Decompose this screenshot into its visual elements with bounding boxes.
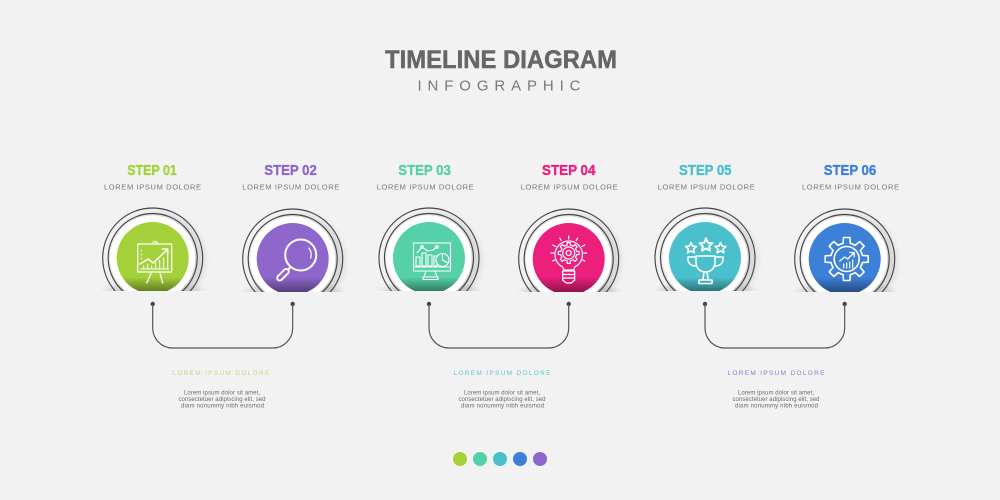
- connector 3: [703, 302, 847, 348]
- text block 3: diam nonummy nibh euismod: [735, 404, 818, 410]
- text block 2: diam nonummy nibh euismod: [461, 404, 544, 410]
- text block 2: LOREM IPSUM DOLORE: [454, 370, 551, 377]
- text block 2: [454, 370, 551, 410]
- step 4 heading: STEP 04: [542, 162, 596, 179]
- text block 3: Lorem ipsum dolor sit amet,: [738, 390, 814, 396]
- step 6 caption: LOREM IPSUM DOLORE: [802, 182, 899, 192]
- step 1 caption: LOREM IPSUM DOLORE: [104, 182, 201, 192]
- step 5 circle: [654, 207, 758, 291]
- text block 1: LOREM IPSUM DOLORE: [172, 370, 270, 377]
- text block 2: Lorem ipsum dolor sit amet,: [464, 390, 540, 396]
- step 3 circle: [378, 207, 482, 291]
- text block 3: [728, 370, 825, 410]
- step 6 circle: [794, 208, 898, 292]
- text block 1: consectetuer adipiscing elit, sed: [178, 397, 266, 403]
- text block 1: Lorem ipsum dolor sit amet,: [184, 390, 260, 396]
- icon: monitor dashboard: [414, 243, 450, 280]
- step 5 heading: STEP 05: [679, 162, 732, 179]
- step 3 heading: STEP 03: [398, 162, 451, 179]
- step 6 heading: STEP 06: [824, 162, 876, 179]
- text block 1: diam nonummy nibh euismod: [181, 404, 264, 410]
- step 2 heading: STEP 02: [264, 162, 317, 179]
- step 1 heading: STEP 01: [127, 162, 177, 179]
- icon: light bulb with gear: [551, 236, 587, 283]
- icon: trophy with stars: [686, 238, 726, 284]
- step 2 caption: LOREM IPSUM DOLORE: [242, 182, 339, 192]
- subtitle: INFOGRAPHIC: [418, 78, 581, 94]
- connector 1: [150, 302, 295, 348]
- icon: presentation board: [138, 242, 172, 283]
- text block 1: [172, 370, 270, 410]
- icon: gear with chart: [825, 238, 868, 280]
- step 5 caption: LOREM IPSUM DOLORE: [658, 182, 755, 192]
- text block 2: consectetuer adipiscing elit, sed: [458, 397, 546, 403]
- step 4 circle: [518, 208, 622, 292]
- step 3 caption: LOREM IPSUM DOLORE: [377, 182, 474, 192]
- text block 3: consectetuer adipiscing elit, sed: [732, 397, 820, 403]
- connector 2: [427, 302, 571, 348]
- icon: magnifier: [280, 240, 316, 278]
- title: TIMELINE DIAGRAM: [385, 46, 617, 74]
- step 4 caption: LOREM IPSUM DOLORE: [521, 182, 618, 192]
- text block 3: LOREM IPSUM DOLORE: [728, 370, 825, 377]
- step 2 circle: [242, 208, 346, 292]
- colour dots: [453, 452, 547, 466]
- step 1 circle: [102, 207, 206, 291]
